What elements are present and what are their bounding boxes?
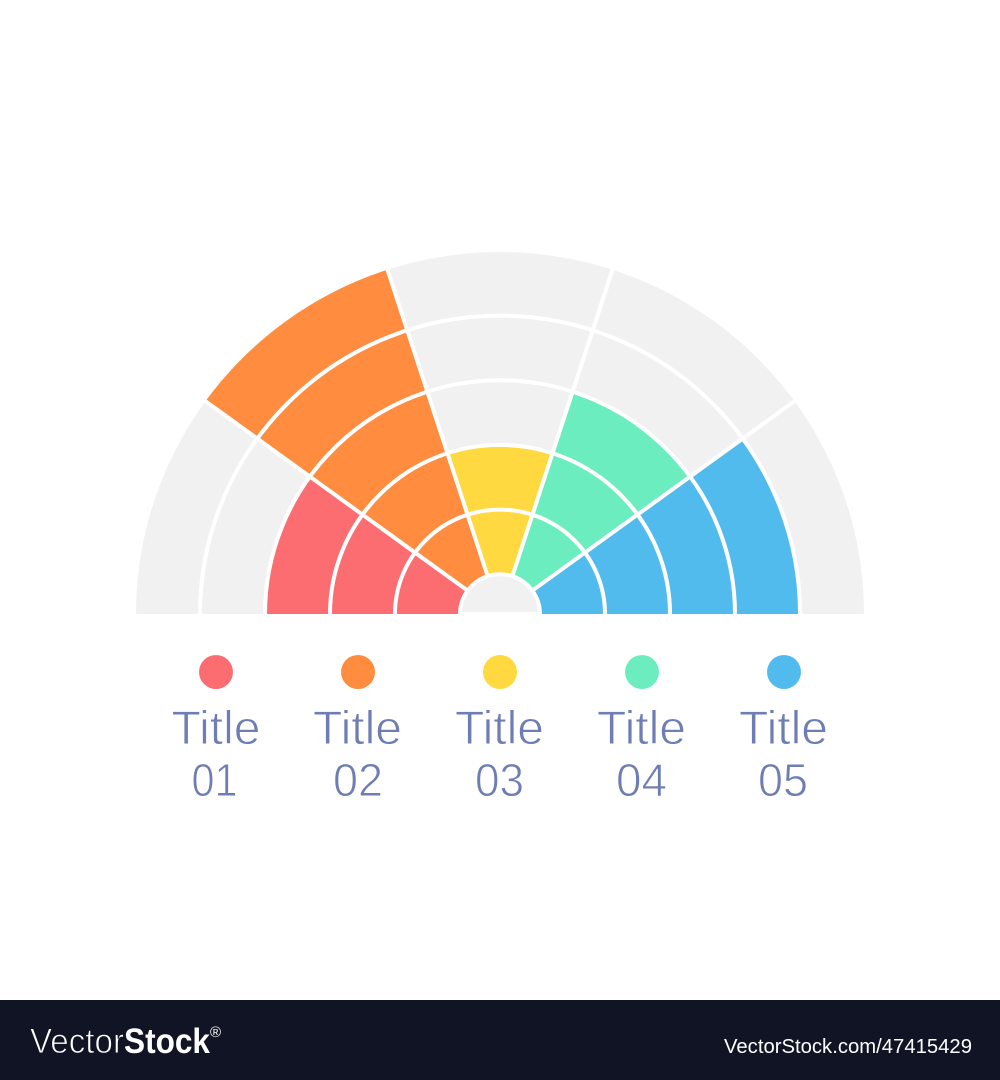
legend item: Title 03: 03 bbox=[475, 754, 524, 806]
sector: Title 04 green bbox=[500, 392, 690, 614]
legend item: Title 01: 01 bbox=[192, 754, 238, 806]
sector: Title 01 red bbox=[265, 477, 500, 614]
footer logo bbox=[30, 1022, 210, 1061]
legend item: Title 04: Title bbox=[597, 701, 686, 754]
legend item: Title 03: Title bbox=[455, 701, 544, 754]
chart background: grey semicircle bbox=[136, 252, 864, 614]
legend item: Title 02 bbox=[313, 655, 402, 806]
footer logo: Stock bbox=[124, 1022, 210, 1061]
legend item: Title 05 bbox=[739, 655, 828, 806]
semicircular radial chart bbox=[130, 252, 870, 620]
legend item: Title 03 bbox=[455, 655, 544, 806]
legend item: Title 05: 05 bbox=[758, 754, 808, 806]
legend item: Title 04: 04 bbox=[616, 754, 667, 806]
footer logo: Vector bbox=[30, 1022, 124, 1061]
legend item: Title 02: 02 bbox=[333, 754, 383, 806]
footer image id: VectorStock.com/47415429 bbox=[724, 1036, 972, 1058]
sector: Title 02 orange bbox=[206, 270, 500, 614]
center hub bbox=[460, 574, 540, 614]
legend item: Title 05: Title bbox=[739, 701, 828, 754]
sector: Title 05 blue bbox=[500, 439, 800, 614]
legend item: Title 04 bbox=[597, 655, 686, 806]
legend item: Title 01 bbox=[172, 655, 260, 806]
legend item: Title 02: Title bbox=[313, 701, 402, 754]
registered mark: ® bbox=[210, 1024, 221, 1041]
sector: Title 03 yellow bbox=[448, 445, 552, 614]
footer bar bbox=[0, 1000, 1000, 1080]
legend item: Title 01: Title bbox=[172, 701, 260, 754]
